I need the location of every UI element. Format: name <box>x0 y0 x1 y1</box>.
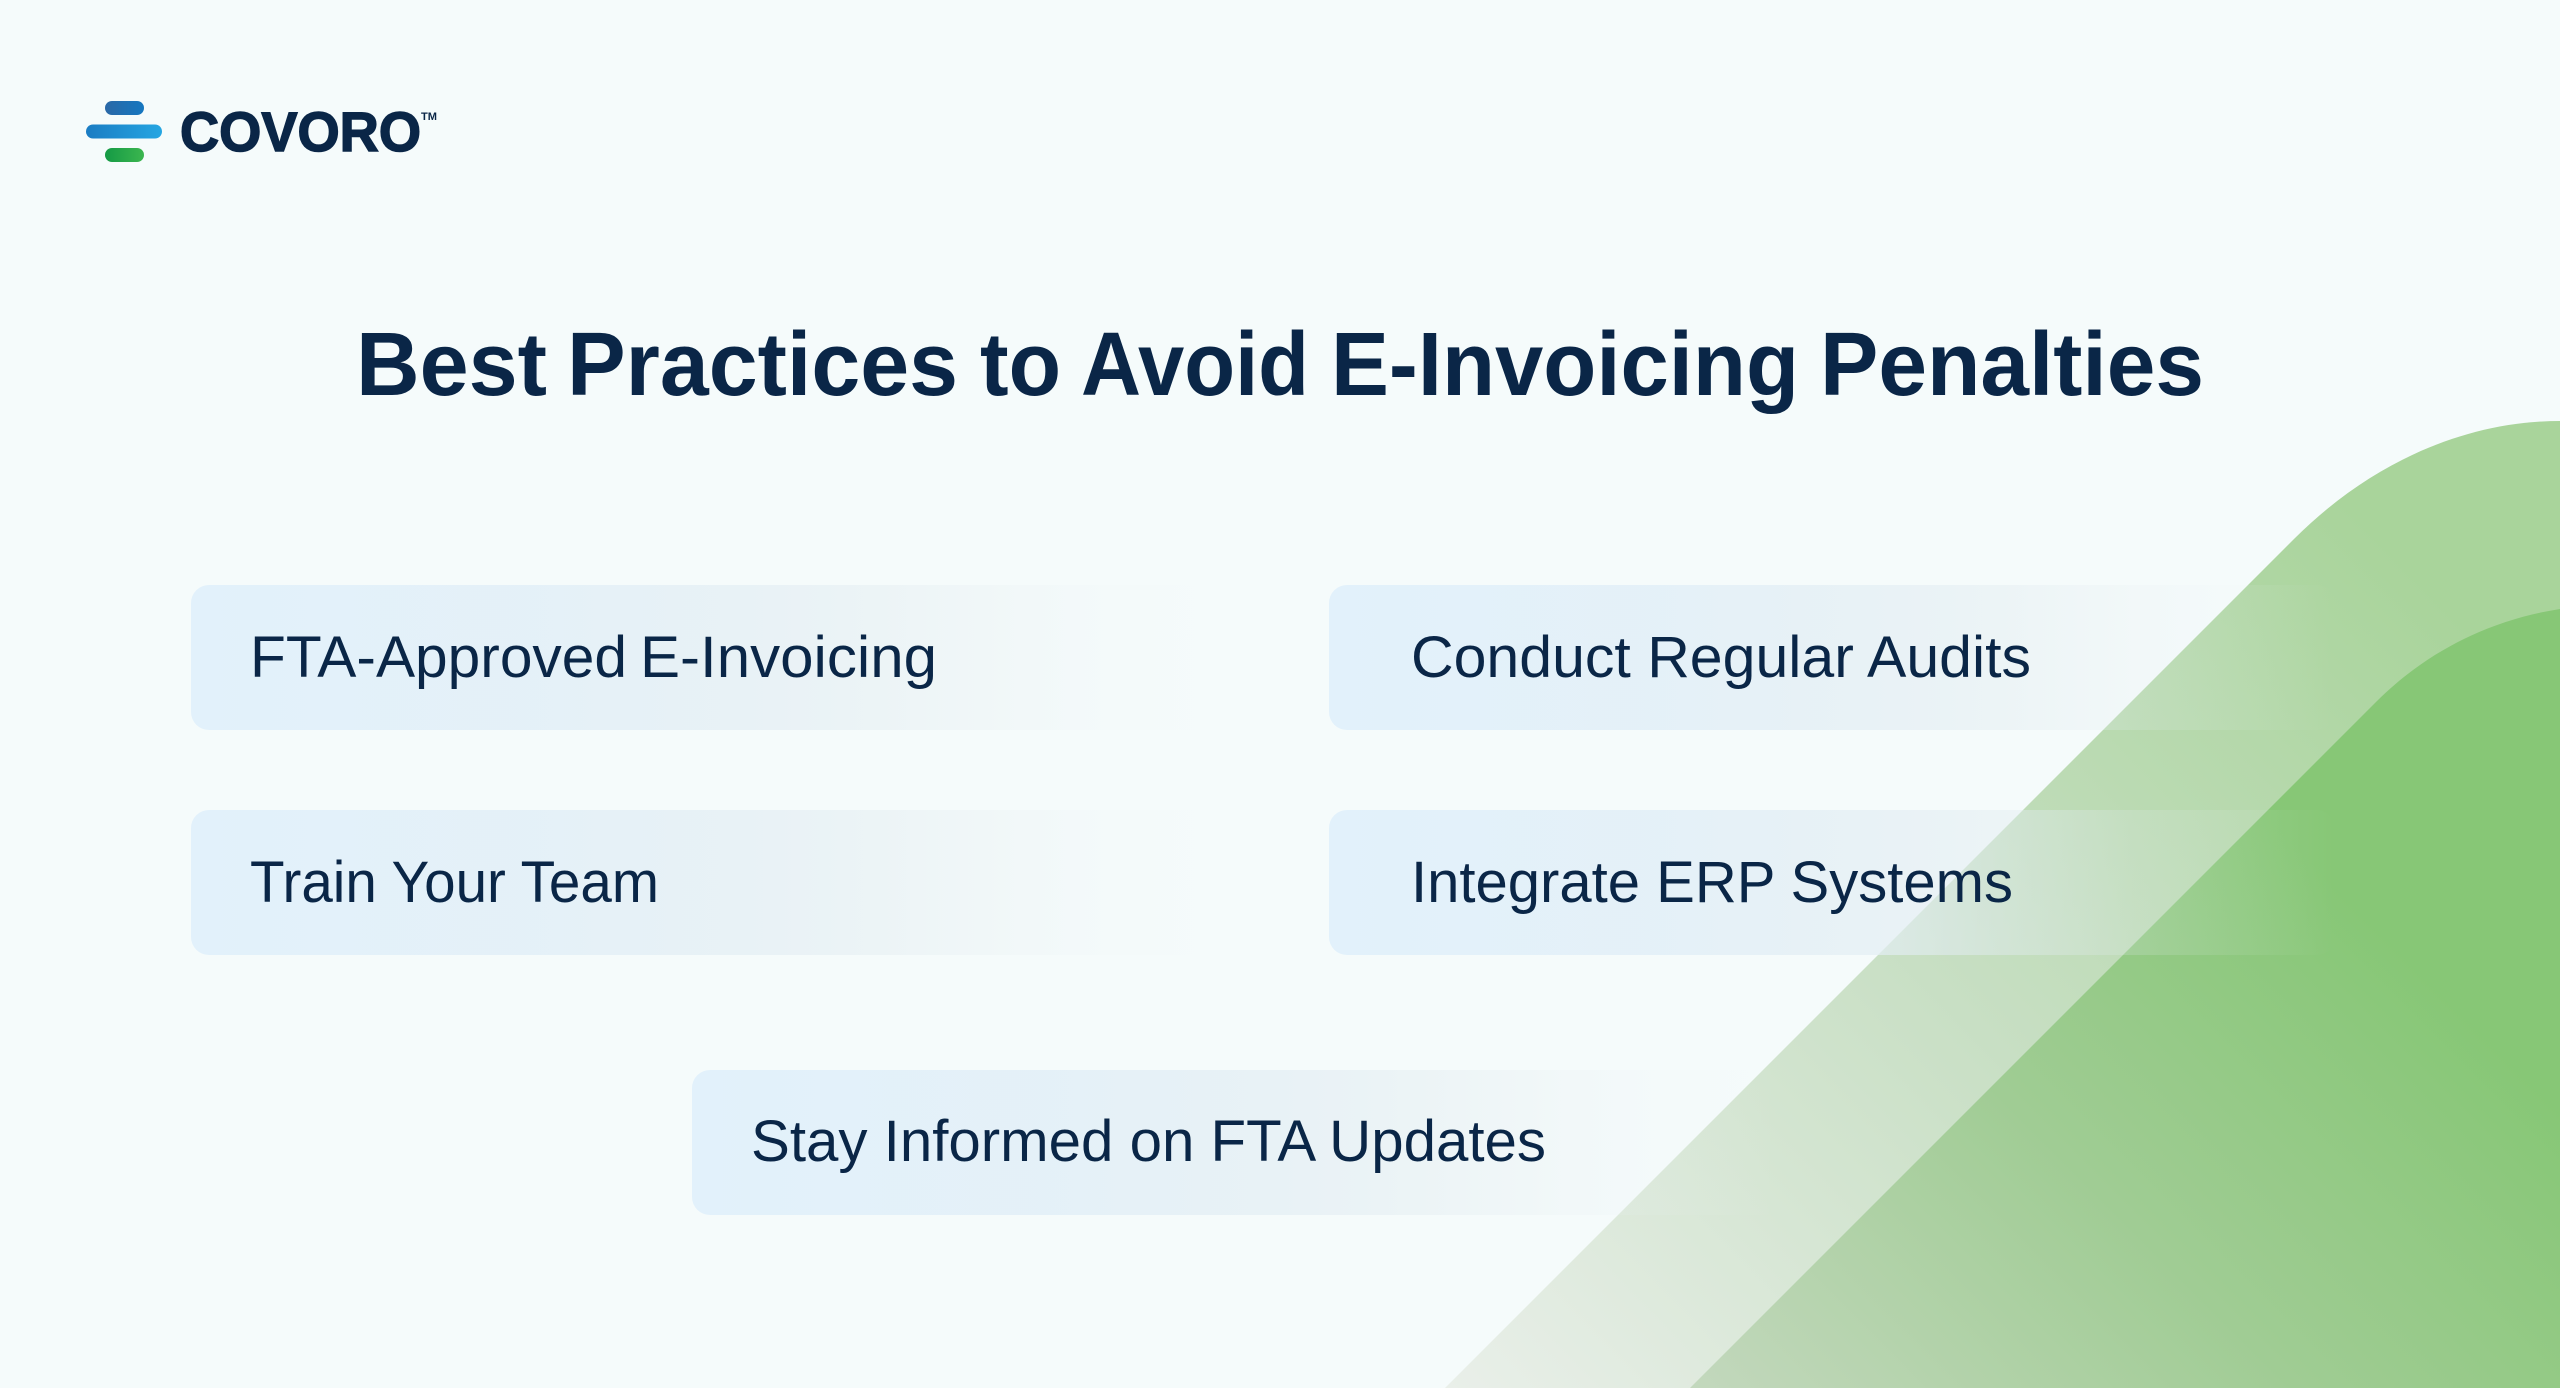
card: Conduct Regular Audits: Conduct Regular Audits <box>1411 625 2031 690</box>
card: Integrate ERP Systems <box>1329 810 2335 955</box>
card: FTA-Approved E-Invoicing <box>191 585 1225 730</box>
title: Penalties <box>1820 315 2204 415</box>
card: Stay Informed on FTA Updates <box>692 1070 1782 1215</box>
card: FTA-Approved E-Invoicing: E-Invoicing <box>640 625 937 690</box>
card: Integrate ERP Systems: Integrate ERP Systems <box>1411 850 2013 915</box>
icon: logo bars <box>86 101 162 162</box>
outer green swoosh <box>1445 421 2560 1388</box>
card: FTA-Approved E-Invoicing: FTA-Approved <box>250 625 627 690</box>
logo wordmark: COVORO <box>180 100 421 163</box>
card: Train Your Team: Train Your Team <box>250 850 659 915</box>
title: Practices <box>567 315 958 415</box>
card: Train Your Team <box>191 810 1225 955</box>
title: Best <box>356 315 547 415</box>
title <box>356 315 2204 415</box>
card: Conduct Regular Audits <box>1329 585 2335 730</box>
title: to <box>980 315 1061 415</box>
card: Stay Informed on FTA Updates: Stay Informed on FTA Updates <box>751 1109 1546 1174</box>
trademark: TM <box>421 111 437 123</box>
logo <box>86 100 437 163</box>
inner green swoosh <box>1690 609 2560 1388</box>
title: Avoid <box>1081 315 1309 415</box>
title: E-Invoicing <box>1331 315 1799 415</box>
